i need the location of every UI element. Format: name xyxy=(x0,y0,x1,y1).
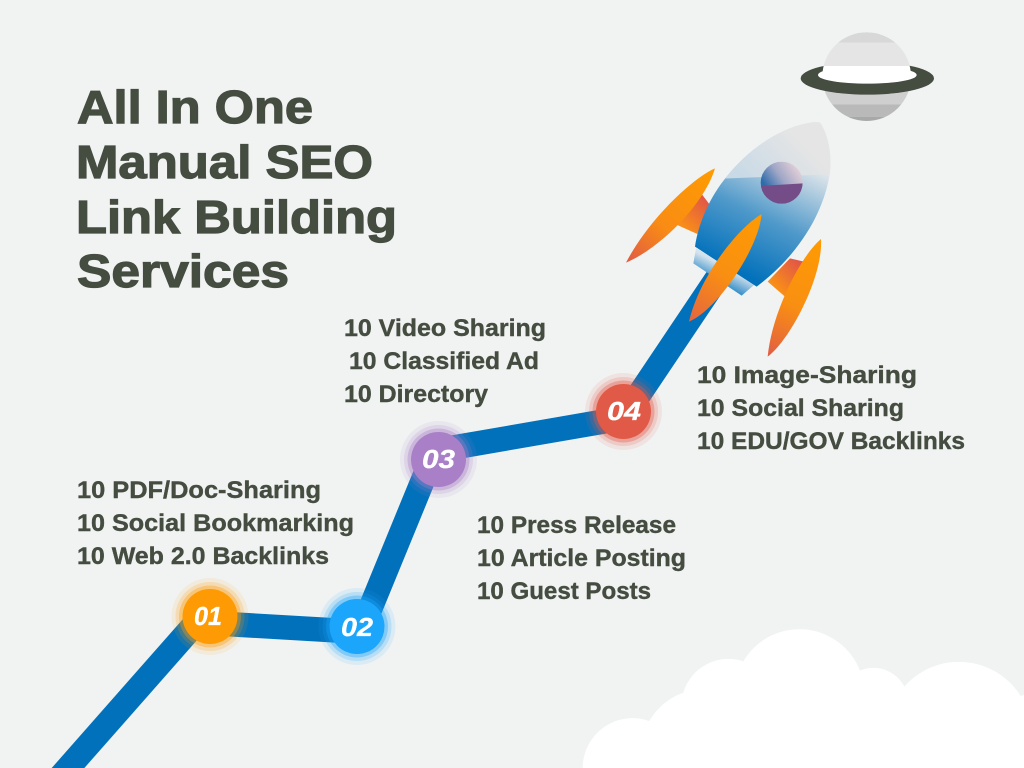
icon: ringed planet xyxy=(801,30,934,123)
title: All In One xyxy=(77,81,313,133)
title: Link Building xyxy=(76,191,397,243)
title xyxy=(76,81,397,297)
cloud xyxy=(583,629,1024,768)
text block: step 3 xyxy=(344,315,546,408)
text block: step 3: 10 Video Sharing xyxy=(344,315,546,342)
text block: step 2: 10 Guest Posts xyxy=(477,578,651,605)
text block: step 3: 10 Directory xyxy=(344,381,488,408)
rocket nose xyxy=(726,143,816,178)
centre fin xyxy=(689,214,762,322)
growth path line xyxy=(50,271,722,768)
right fin xyxy=(768,239,821,357)
node 01: 01 xyxy=(194,601,222,631)
text block: step 2: 10 Article Posting xyxy=(477,545,686,572)
title: Services xyxy=(77,245,289,297)
title: Manual SEO xyxy=(76,136,373,188)
left strut xyxy=(675,194,710,234)
porthole xyxy=(760,162,803,204)
nozzle xyxy=(693,248,757,296)
node 01 xyxy=(172,578,248,655)
text block: step 4: 10 Image-Sharing xyxy=(697,362,917,389)
text block: step 3: 10 Classified Ad xyxy=(349,348,539,375)
node 04: 04 xyxy=(607,396,642,426)
text block: step 2: 10 Press Release xyxy=(477,512,676,539)
text block: step 4: 10 EDU/GOV Backlinks xyxy=(697,428,965,455)
right strut xyxy=(768,258,804,297)
text block: step 2 xyxy=(477,512,686,605)
text block: step 1: 10 Web 2.0 Backlinks xyxy=(77,543,329,570)
text block: step 1: 10 Social Bookmarking xyxy=(77,510,354,537)
icon: rocket xyxy=(626,122,831,357)
text block: step 1: 10 PDF/Doc-Sharing xyxy=(77,477,321,504)
node 04 xyxy=(585,373,662,450)
rocket body xyxy=(695,122,831,287)
node 03 xyxy=(400,421,477,498)
node 02: 02 xyxy=(341,612,374,642)
node 03: 03 xyxy=(422,444,456,474)
text block: step 1 xyxy=(77,477,354,570)
node 02 xyxy=(318,588,396,665)
left fin xyxy=(626,168,715,263)
text block: step 4: 10 Social Sharing xyxy=(697,395,904,422)
text block: step 4 xyxy=(697,362,965,455)
